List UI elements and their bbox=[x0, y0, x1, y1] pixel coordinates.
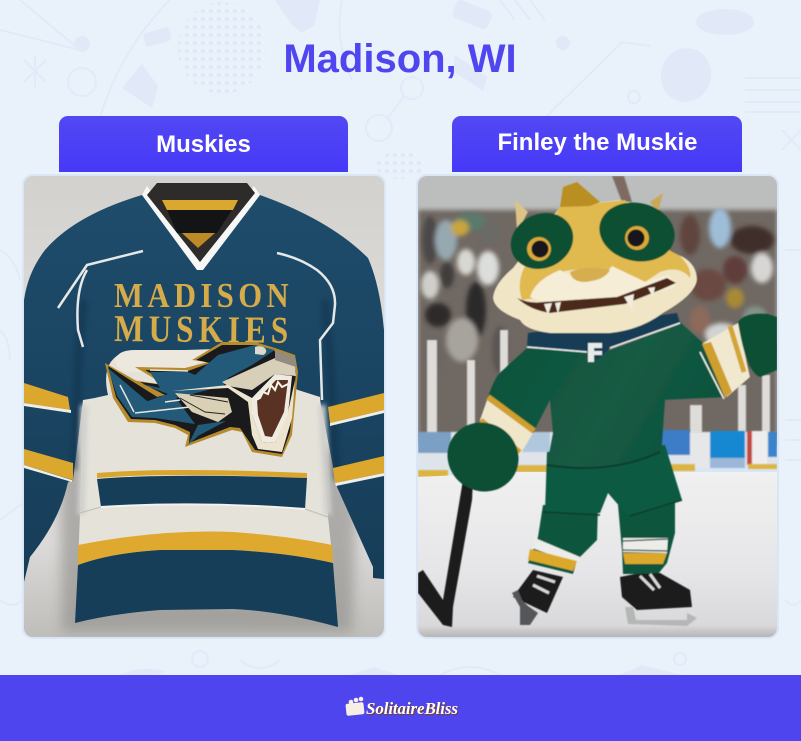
tab heading: Finley the Muskie bbox=[452, 116, 742, 172]
shoulder piping bbox=[58, 251, 335, 400]
brand logo: SolitaireBliss bbox=[366, 699, 458, 718]
glass posts bbox=[427, 330, 770, 435]
panel: hockey jersey photo bbox=[22, 174, 386, 639]
brand logo: SolitaireBliss bbox=[367, 700, 459, 719]
right leg bbox=[618, 495, 697, 626]
arena ceiling and crowd bbox=[418, 176, 777, 446]
tab heading: Muskies bbox=[59, 116, 348, 172]
mascot figure bbox=[435, 182, 777, 626]
muskie fish logo bbox=[105, 342, 298, 457]
jersey wordmark: MUSKIES bbox=[114, 308, 293, 352]
tab heading: Finley the Muskie: Finley the Muskie bbox=[497, 129, 698, 156]
hem stripes bbox=[78, 470, 333, 565]
hem bbox=[75, 550, 338, 627]
jersey shadow bbox=[60, 450, 358, 632]
jersey shoulders and sleeves bbox=[24, 195, 384, 582]
title: Madison, WI bbox=[283, 37, 517, 81]
right skate bbox=[620, 573, 692, 610]
white body panel bbox=[78, 349, 333, 565]
left skate bbox=[513, 570, 563, 613]
footer band bbox=[0, 675, 801, 741]
collar bbox=[142, 183, 260, 270]
mascot head bbox=[493, 182, 697, 333]
icon: cards bbox=[345, 697, 365, 716]
right arm and cuff bbox=[660, 314, 777, 400]
torso and left arm bbox=[480, 313, 680, 468]
left mitt bbox=[446, 422, 520, 492]
hockey stick bbox=[418, 480, 473, 627]
panel: mascot photo bbox=[416, 174, 779, 639]
jersey wordmark: MADISON bbox=[114, 276, 293, 315]
shorts bbox=[545, 445, 682, 515]
ice bbox=[418, 472, 777, 637]
left leg bbox=[512, 505, 598, 625]
tab heading: Muskies: Muskies bbox=[156, 131, 251, 158]
rink boards bbox=[418, 430, 777, 477]
jersey wordmark bbox=[114, 284, 288, 344]
brand logo bbox=[345, 697, 459, 719]
